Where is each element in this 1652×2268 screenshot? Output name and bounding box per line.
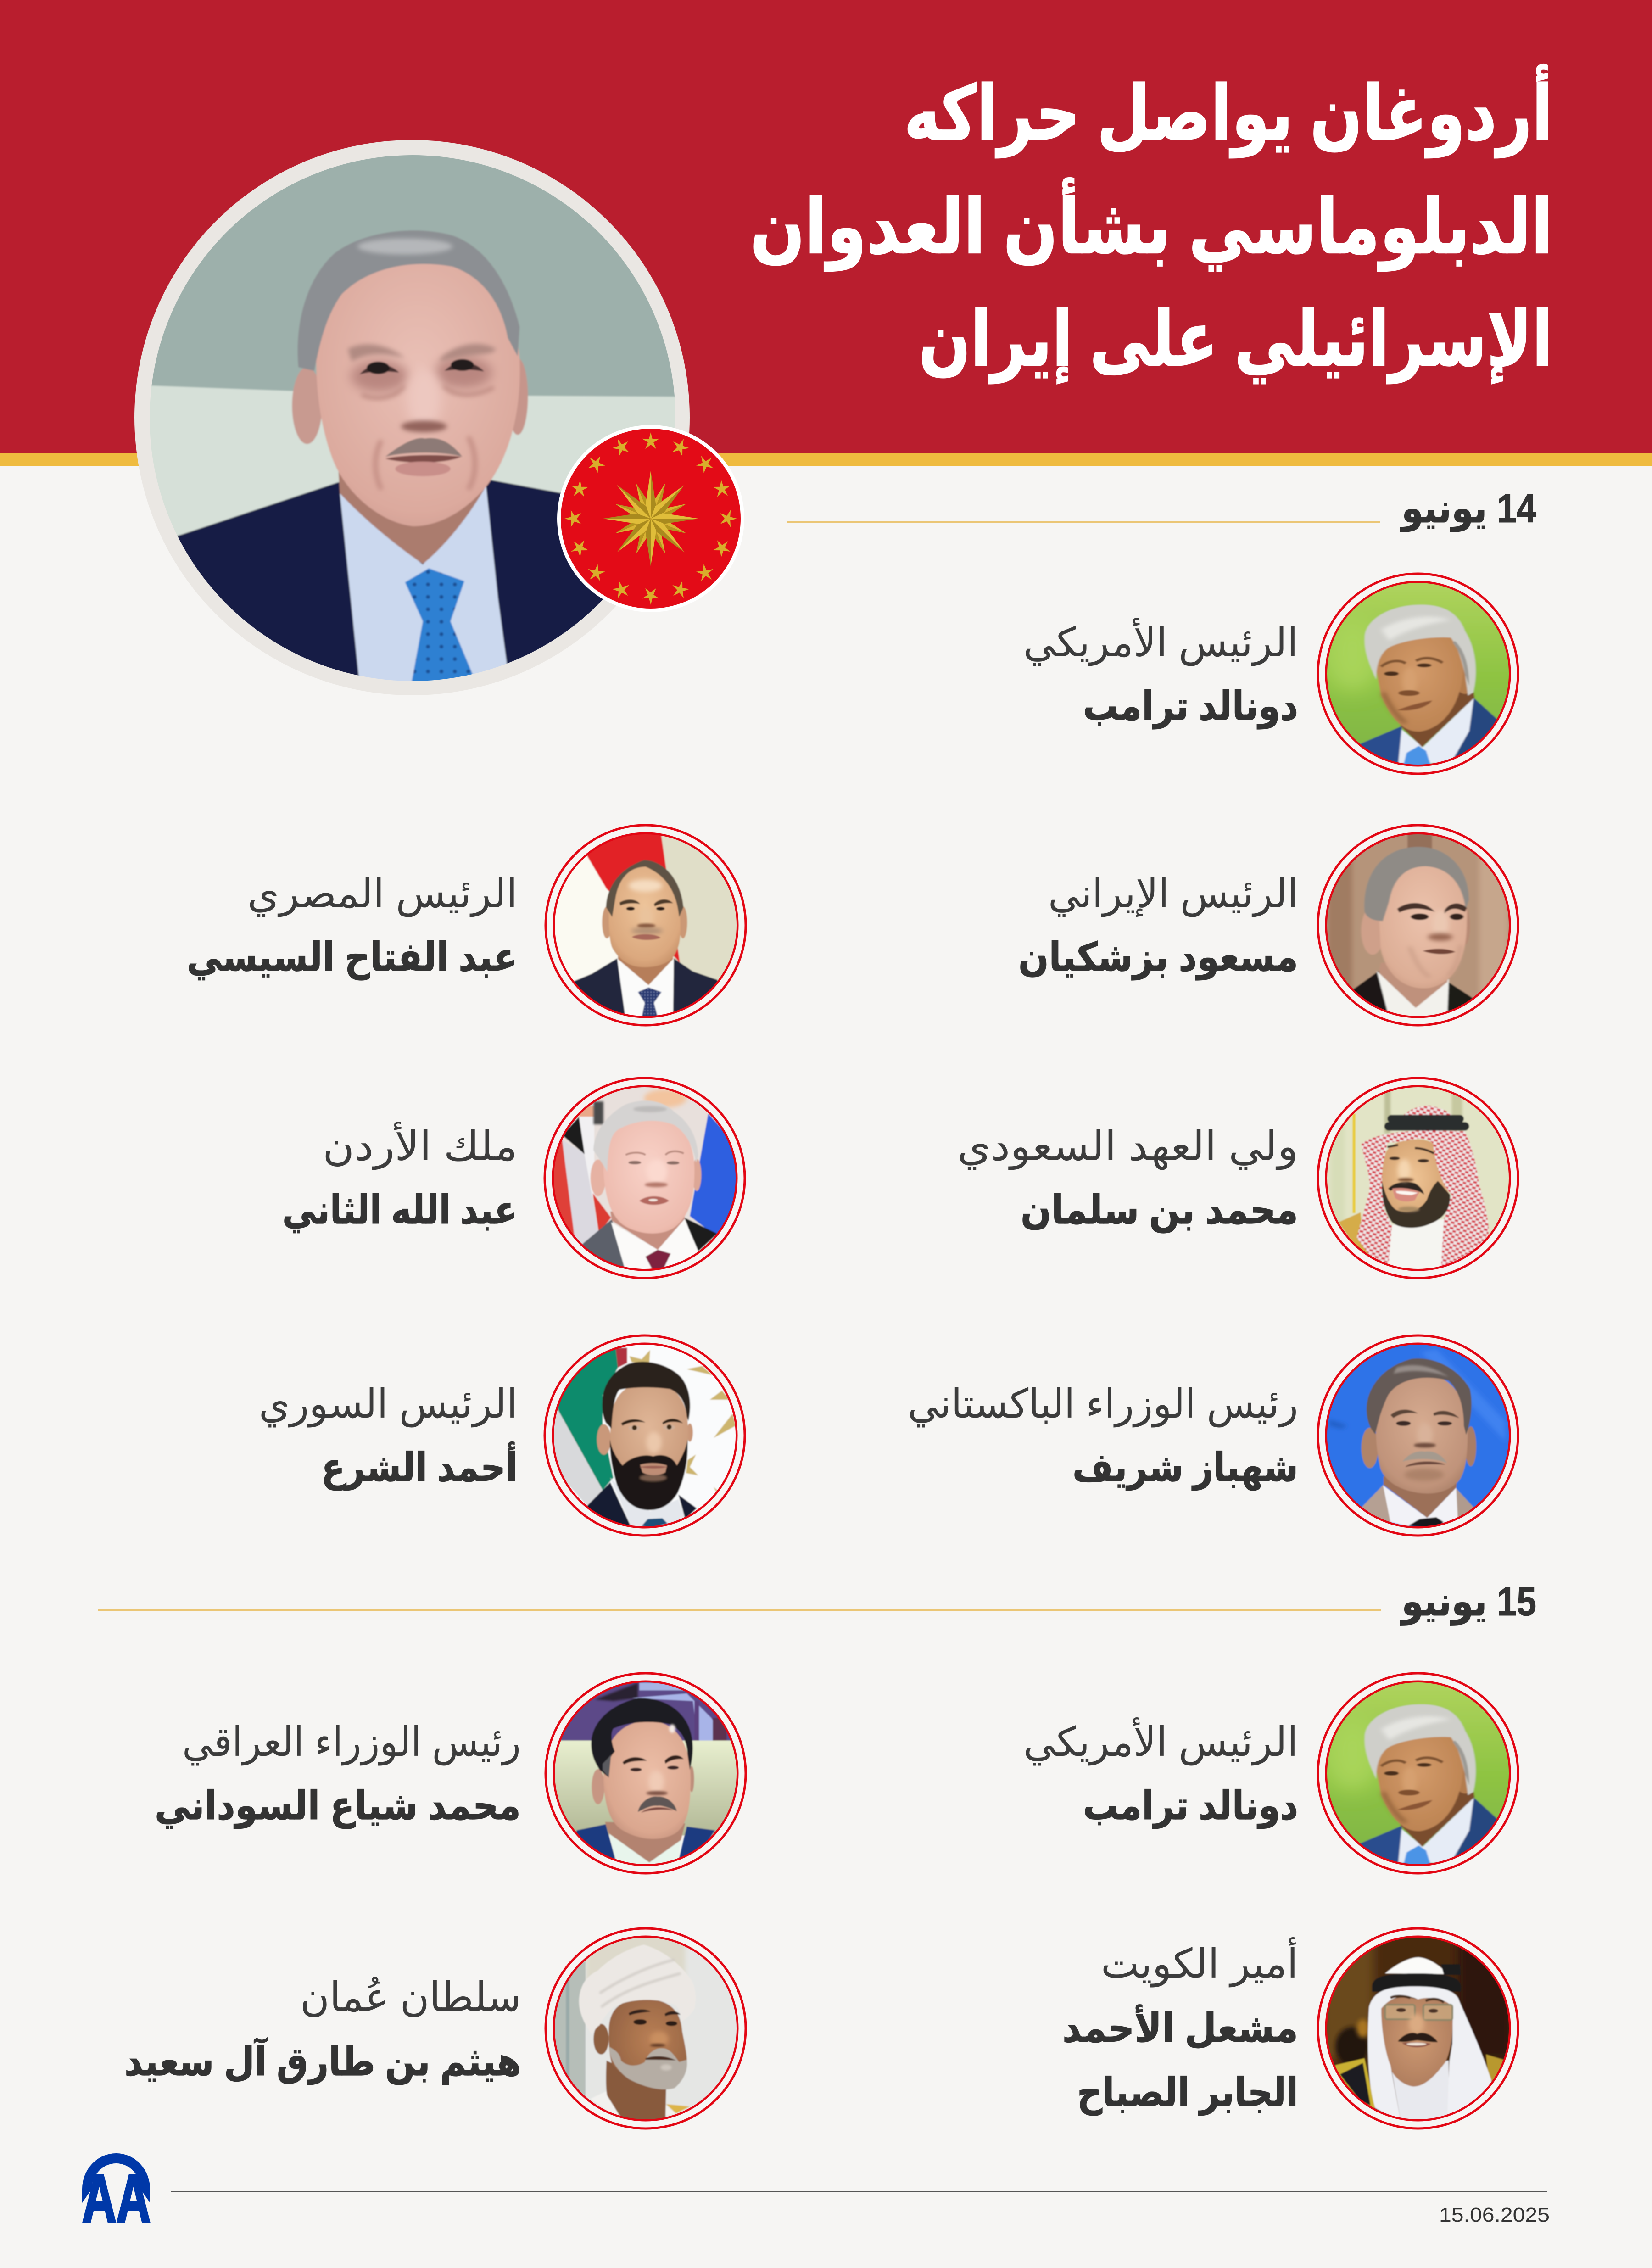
portrait: al-Sharaa (546, 1340, 745, 1539)
footer rule (171, 2191, 1547, 2192)
portrait: Sharif (1322, 1340, 1514, 1533)
gold header rule (0, 453, 1652, 466)
label: role: ملك الأردن (323, 1122, 518, 1170)
label: name: هيثم بن طارق آل سعيد (124, 2038, 521, 2085)
card: Pezeshkian (1018, 821, 1529, 1027)
card: Trump, 15 June (1023, 1650, 1549, 1895)
portrait: al-Sudani (546, 1675, 745, 1874)
main portrait: Erdogan (134, 140, 690, 695)
label: name line one: مشعل الأحمد (1062, 2005, 1298, 2050)
portrait: Pezeshkian (1327, 834, 1509, 1016)
label: role: الرئيس الإيراني (1048, 871, 1298, 917)
label: role: الرئيس الأمريكي (1023, 618, 1298, 666)
logo: Anadolu Agency: AA (82, 2161, 151, 2236)
label: role: أمير الكويت (1101, 1937, 1298, 1988)
label: name: شهباز شريف (1072, 1446, 1298, 1491)
portrait: Trump (1327, 583, 1509, 765)
label: name: عبد الله الثاني (282, 1188, 518, 1233)
section heading: 14 June (787, 486, 1536, 532)
label: role: ولي العهد السعودي (957, 1123, 1298, 1170)
label: name: محمد بن سلمان (1021, 1188, 1298, 1233)
logo: Anadolu Agency (82, 2153, 151, 2236)
card: King Abdullah (282, 1078, 745, 1282)
label: name: مسعود بزشكيان (1018, 935, 1298, 980)
title (750, 64, 1553, 384)
section heading: 15 June (98, 1579, 1536, 1626)
card: al-Sudani (155, 1673, 746, 1874)
label: name: دونالد ترامب (1083, 1784, 1298, 1829)
label: role: رئيس الوزراء الباكستاني (908, 1381, 1298, 1428)
label: role: سلطان عُمان (300, 1974, 521, 2020)
card: Mohammed bin Salman (957, 1078, 1518, 1278)
section heading: 15 June: 15 يونيو (1400, 1579, 1536, 1626)
header band (0, 0, 1652, 453)
card: Trump, 14 June (1026, 573, 1519, 775)
icon: sixteen stars (564, 432, 737, 605)
label: name: دونالد ترامب (1083, 684, 1298, 729)
label: role: الرئيس المصري (247, 871, 518, 917)
label: name: عبد الفتاح السيسي (187, 935, 518, 980)
label: role: الرئيس الأمريكي (1023, 1717, 1298, 1766)
icon: sun burst (603, 471, 698, 566)
portrait: Sisi (555, 834, 737, 1016)
label: name line two: الجابر الصباح (1077, 2071, 1298, 2116)
card: Sultan of Oman (124, 1928, 746, 2128)
label: role: رئيس الوزراء العراقي (182, 1719, 521, 1766)
label: name: أحمد الشرع (321, 1441, 518, 1491)
card: Emir of Kuwait (1062, 1928, 1518, 2128)
portrait: Trump (1287, 1650, 1549, 1895)
label: name: محمد شياع السوداني (155, 1784, 521, 1829)
portrait: Emir of Kuwait (1322, 1932, 1514, 2125)
date: 15.06.2025 (1439, 2204, 1550, 2226)
card: Sisi (187, 825, 748, 1029)
card: Ahmad al-Sharaa (259, 1335, 745, 1539)
card: Shehbaz Sharif (908, 1335, 1518, 1536)
section heading: 14 June: 14 يونيو (1400, 486, 1536, 532)
emblem: Presidency seal (557, 425, 744, 612)
label: role: الرئيس السوري (259, 1381, 518, 1428)
portrait: bin Salman (1322, 1083, 1514, 1276)
portrait: Sultan Haitham (546, 1932, 745, 2125)
portrait: King Abdullah (546, 1083, 745, 1282)
